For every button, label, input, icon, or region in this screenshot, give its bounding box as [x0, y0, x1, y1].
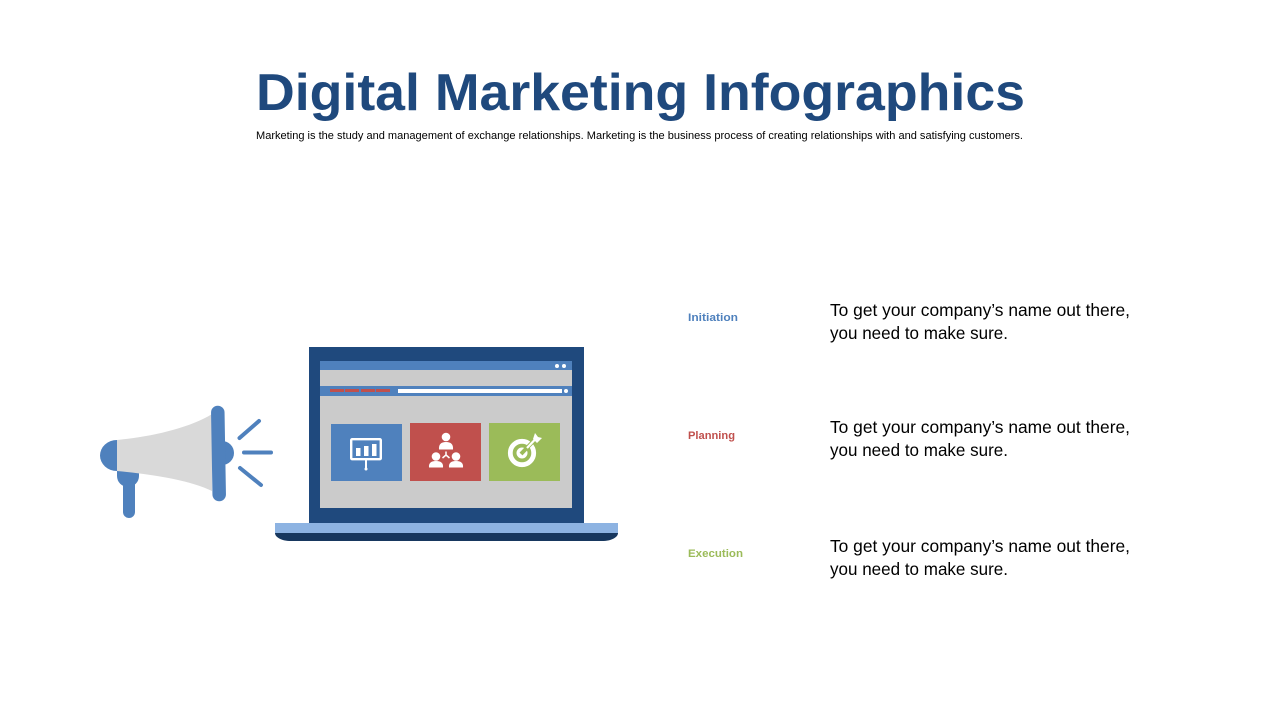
laptop base [275, 523, 618, 541]
tile: target icon [489, 423, 560, 481]
label: Initiation: Initiation [688, 312, 738, 324]
icon: megaphone [100, 412, 271, 518]
laptop illustration [275, 347, 618, 541]
description: Initiation: you need to make sure. [830, 323, 1008, 343]
row: Execution [688, 536, 1130, 579]
tile: people network icon [410, 423, 481, 481]
description: Planning: To get your company’s name out there, [830, 417, 1130, 437]
description: Initiation: To get your company’s name out there, [830, 300, 1130, 320]
laptop screen [320, 361, 572, 508]
row: Planning [688, 417, 1130, 460]
subtitle text: Marketing is the study and management of exchange relationships. Marketing is the business process of creating relationships with and satisfying customers. [256, 130, 1023, 142]
description: Planning: you need to make sure. [830, 440, 1008, 460]
description: Execution: To get your company’s name out there, [830, 536, 1130, 556]
title: Digital Marketing Infographics [256, 64, 1025, 122]
browser nav bar [320, 386, 572, 396]
description: Execution: you need to make sure. [830, 559, 1008, 579]
browser title bar [320, 361, 572, 370]
row: Initiation [688, 300, 1130, 343]
label: Planning: Planning [688, 430, 735, 442]
label: Execution: Execution [688, 548, 743, 560]
tile: presentation chart icon [331, 424, 402, 481]
laptop body [309, 347, 584, 523]
